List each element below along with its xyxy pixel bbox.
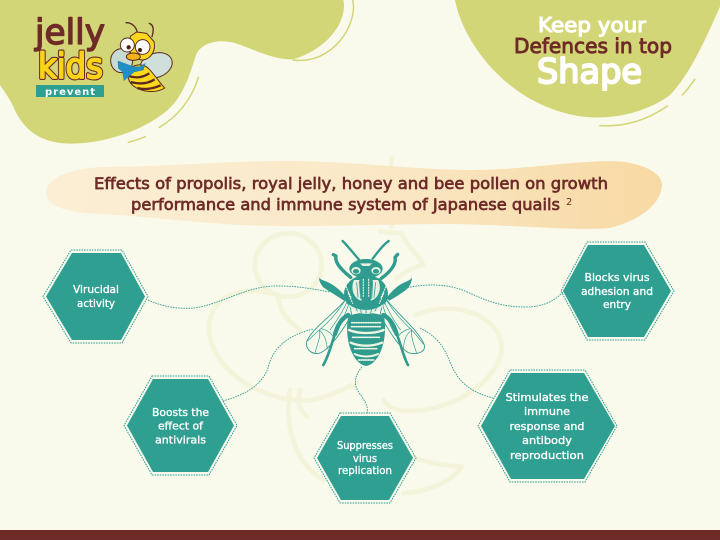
hexagon: Boosts the effect of antivirals: Boosts the	[152, 406, 209, 419]
central bee illustration	[306, 241, 425, 366]
bee wings	[306, 297, 425, 354]
hexagon: Stimulates the immune response and antibody reproduction: immune	[524, 405, 570, 418]
title text: performance and immune system of Japanese quails	[131, 195, 560, 214]
logo word: jelly: jelly	[34, 13, 105, 53]
hexagon: Blocks virus adhesion and entry	[561, 242, 674, 340]
hexagon: Virucidal activity: activity	[77, 297, 115, 310]
logo badge: prevent: prevent	[45, 87, 95, 98]
hexagon: Stimulates the immune response and antibody reproduction: antibody	[522, 434, 572, 447]
logo word: kids: kids	[38, 47, 103, 87]
hexagon: Stimulates the immune response and antibody reproduction	[478, 370, 617, 482]
tagline	[514, 13, 672, 92]
tagline: Defences in top	[514, 34, 672, 58]
blob accent arcs	[600, 79, 695, 126]
title text	[94, 174, 608, 214]
hexagon: Blocks virus adhesion and entry: entry	[603, 298, 631, 311]
bee antennae	[343, 241, 389, 260]
hexagon: Blocks virus adhesion and entry: Blocks virus	[584, 271, 650, 284]
hexagon: Suppresses virus replication	[314, 413, 416, 503]
footer bar	[0, 530, 720, 540]
bee hind legs	[323, 315, 408, 365]
hexagon: Stimulates the immune response and antibody reproduction: Stimulates the	[506, 391, 589, 404]
top-right green blob	[455, 0, 720, 126]
hexagon: Suppresses virus replication: Suppresses	[337, 439, 393, 452]
tagline: Shape	[537, 52, 642, 92]
hexagon: Stimulates the immune response and antibody reproduction: response and	[510, 420, 584, 433]
hexagon: Suppresses virus replication: virus	[353, 452, 377, 465]
icon: mascot bee	[111, 23, 176, 91]
bee head	[349, 259, 383, 278]
tagline: Keep your	[538, 13, 647, 37]
blob accent arcs	[128, 0, 353, 142]
bee forelegs	[333, 254, 398, 279]
hexagon: Boosts the effect of antivirals: antivirals	[155, 434, 206, 446]
brand logo	[34, 13, 105, 98]
bee midlegs	[319, 277, 412, 301]
hexagon: Virucidal activity	[43, 250, 148, 343]
logo word: kids: kids	[38, 47, 103, 87]
hexagon: Boosts the effect of antivirals	[124, 376, 237, 475]
hexagon: Virucidal activity: Virucidal	[73, 283, 119, 296]
title text: 2	[566, 197, 572, 208]
bee thorax	[344, 275, 388, 314]
hexagon: Stimulates the immune response and antibody reproduction: reproduction	[510, 449, 584, 462]
hexagon: Suppresses virus replication: replication	[338, 464, 392, 477]
hexagon: Blocks virus adhesion and entry: adhesion and	[581, 285, 653, 298]
bee abdomen	[347, 313, 385, 366]
hexagon: Boosts the effect of antivirals: effect of	[158, 420, 204, 432]
title ribbon	[46, 161, 662, 229]
top-left green blob	[0, 0, 353, 144]
connector lines	[148, 285, 563, 413]
faint background bee watermark	[209, 158, 502, 493]
title text: Effects of propolis, royal jelly, honey and bee pollen on growth	[94, 174, 608, 193]
